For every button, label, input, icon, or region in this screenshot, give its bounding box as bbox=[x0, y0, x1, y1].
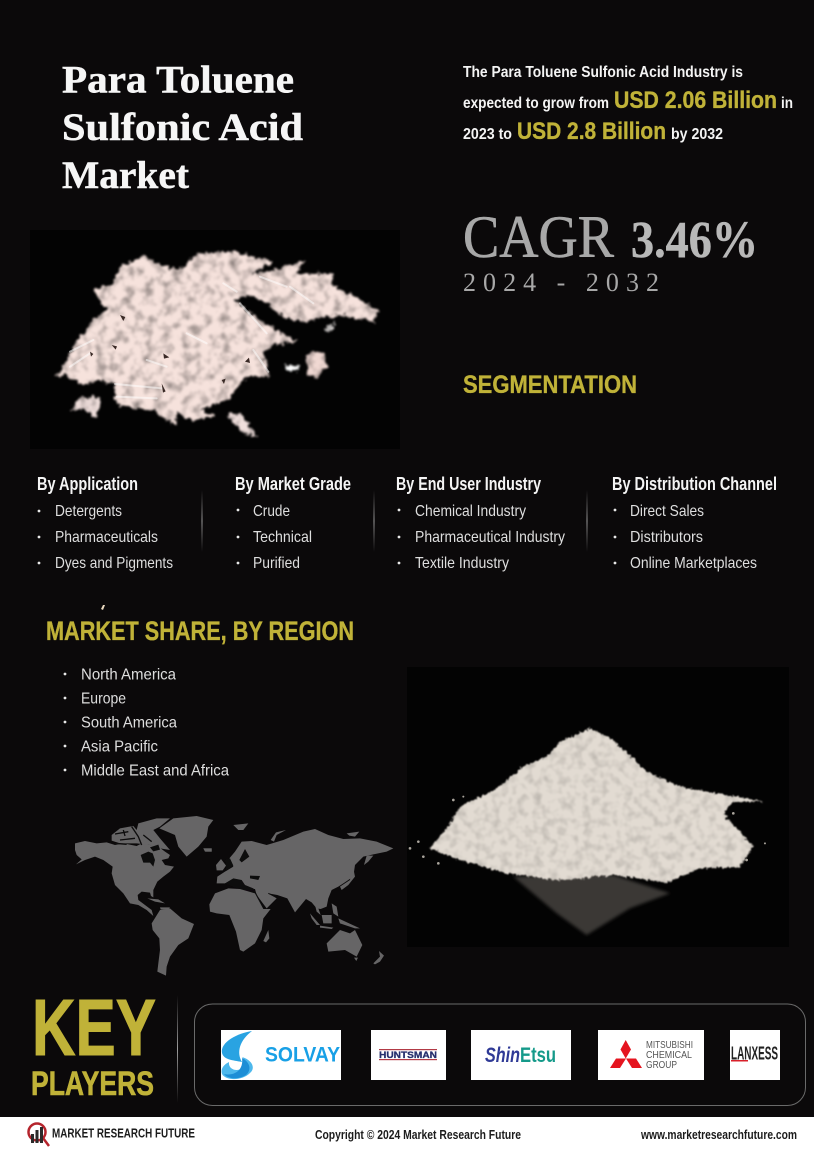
image: crystals bbox=[30, 230, 400, 449]
segmentation: by distribution channel: Online Marketplaces bbox=[630, 555, 757, 572]
panel: key player logos bbox=[194, 1004, 806, 1106]
logo: Mitsubishi Chemical Group: MITSUBISHI bbox=[646, 1040, 693, 1051]
segmentation: by market grade: By Market Grade bbox=[235, 474, 351, 494]
segmentation: by end user industry bbox=[396, 474, 565, 572]
segmentation: by end user industry: Pharmaceutical Industry bbox=[415, 529, 565, 546]
heading: key players: KEY bbox=[32, 983, 156, 1072]
market size statement: by 2032 bbox=[671, 126, 723, 143]
segmentation: by application: Dyes and Pigments bbox=[55, 555, 173, 572]
market size statement: expected to grow from bbox=[463, 95, 609, 112]
market size statement bbox=[463, 64, 793, 145]
segmentation: by end user industry: Chemical Industry bbox=[415, 503, 526, 520]
logo: Shin-Etsu bbox=[471, 1030, 571, 1080]
logo: Shin-Etsu: Etsu bbox=[520, 1044, 556, 1067]
CAGR value: CAGR bbox=[463, 204, 614, 270]
segmentation: by market grade: Technical bbox=[253, 529, 312, 546]
market size statement: in bbox=[781, 95, 793, 112]
logo: Huntsman: HUNTSMAN bbox=[379, 1050, 437, 1061]
region list: Europe bbox=[81, 690, 126, 708]
segmentation: by distribution channel: Direct Sales bbox=[630, 503, 704, 520]
title: Sulfonic Acid bbox=[62, 106, 303, 149]
segmentation: by application: Detergents bbox=[55, 503, 122, 520]
CAGR value: 2024 - 2032 bbox=[463, 268, 659, 297]
title: Market bbox=[62, 154, 189, 197]
world map bbox=[75, 816, 393, 976]
image: powder bbox=[407, 667, 789, 947]
logo: Solvay: SOLVAY bbox=[265, 1044, 340, 1066]
market size statement: USD 2.8 Billion bbox=[517, 118, 666, 145]
logo: Lanxess: LANXESS bbox=[731, 1044, 778, 1064]
market size statement: USD 2.06 Billion bbox=[614, 87, 777, 114]
segmentation: by application: By Application bbox=[37, 474, 138, 494]
logo: Mitsubishi Chemical Group: CHEMICAL bbox=[646, 1050, 692, 1061]
segmentation: by end user industry: By End User Industry bbox=[396, 474, 541, 494]
segmentation: by distribution channel bbox=[612, 474, 777, 572]
logo: Lanxess bbox=[730, 1030, 780, 1080]
title bbox=[62, 58, 303, 197]
heading: segmentation: SEGMENTATION bbox=[463, 371, 637, 399]
CAGR value: 3.46% bbox=[631, 212, 758, 269]
title: Para Toluene bbox=[62, 58, 294, 102]
copyright: Copyright © 2024 Market Research Future bbox=[315, 1127, 521, 1142]
heading: market share by region: MARKET SHARE, BY REGION bbox=[46, 616, 354, 646]
CAGR value bbox=[463, 204, 758, 297]
footer bbox=[0, 1117, 814, 1150]
logo: Huntsman bbox=[371, 1030, 446, 1080]
heading: key players bbox=[31, 983, 156, 1103]
region list: South America bbox=[81, 714, 177, 732]
logo: Market Research Future bbox=[28, 1124, 195, 1146]
region list: North America bbox=[81, 666, 176, 684]
segmentation: by market grade: Purified bbox=[253, 555, 300, 572]
segmentation: by distribution channel: By Distribution Channel bbox=[612, 474, 777, 494]
logo: Market Research Future: MARKET RESEARCH FUTURE bbox=[52, 1126, 195, 1140]
logo: Mitsubishi Chemical Group bbox=[598, 1030, 704, 1080]
heading: key players: PLAYERS bbox=[31, 1065, 154, 1103]
segmentation: by end user industry: Textile Industry bbox=[415, 555, 509, 572]
logo: Solvay bbox=[221, 1030, 341, 1080]
region list: Asia Pacific bbox=[81, 738, 158, 756]
segmentation: by application: Pharmaceuticals bbox=[55, 529, 158, 546]
logo: Mitsubishi Chemical Group: GROUP bbox=[646, 1060, 677, 1071]
segmentation: by market grade: Crude bbox=[253, 503, 290, 520]
market size statement: 2023 to bbox=[463, 126, 512, 143]
logo: Shin-Etsu: Shin bbox=[485, 1044, 520, 1067]
region list: Middle East and Africa bbox=[81, 762, 229, 780]
segmentation: by distribution channel: Distributors bbox=[630, 529, 703, 546]
region list bbox=[64, 666, 229, 780]
segmentation: by market grade bbox=[235, 474, 351, 572]
segmentation: by application bbox=[37, 474, 173, 572]
market size statement: The Para Toluene Sulfonic Acid Industry is bbox=[463, 64, 743, 81]
